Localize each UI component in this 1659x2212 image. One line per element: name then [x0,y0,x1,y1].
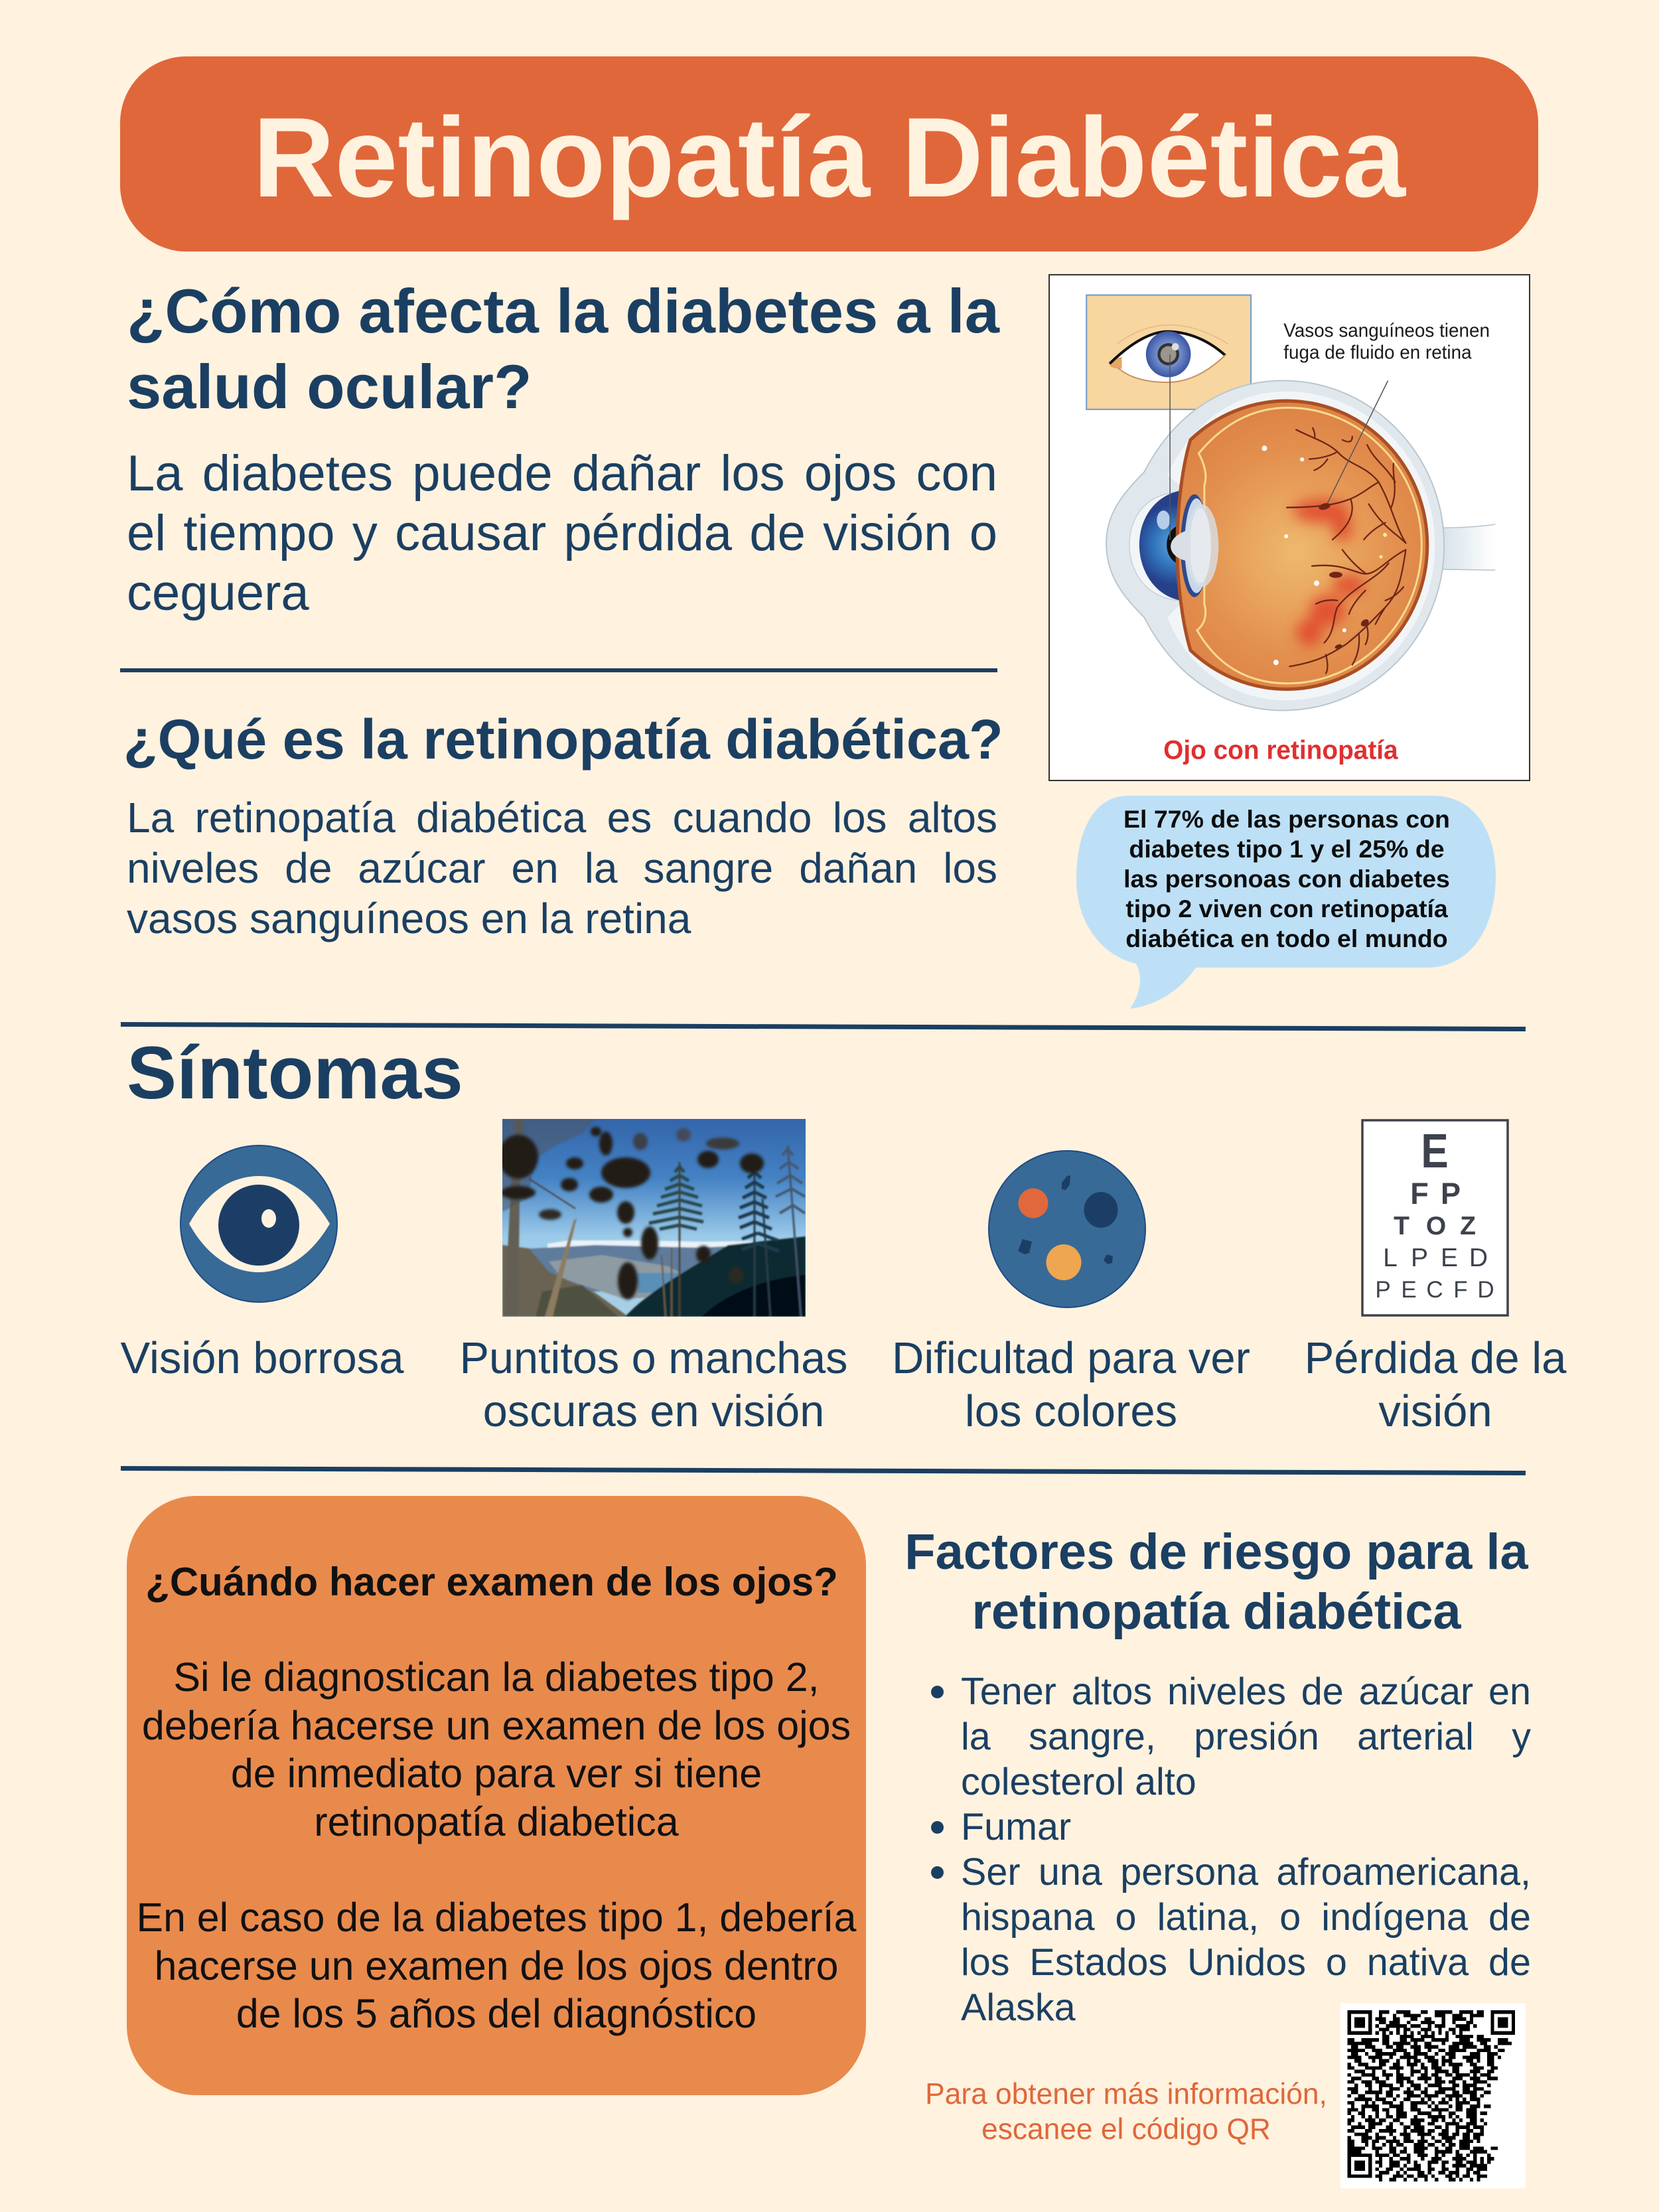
type 2 text: Si le diagnostican la diabetes tipo 2, [173,1655,820,1700]
heading: risk factors: retinopatía diabética [972,1584,1461,1640]
label: blurred vision: Visión borrosa [120,1333,404,1383]
callout label: Vasos sanguíneos tienen [1283,319,1490,340]
figure: eye with retinopathy [1048,274,1530,781]
icon: eye chart: P [1441,1177,1461,1211]
QR code [1340,2003,1526,2189]
icon: eye chart: Z [1460,1212,1476,1240]
heading: how diabetes affects eyes [127,276,1000,421]
icon: eye chart: D [1469,1244,1488,1272]
heading: risk factors [904,1524,1529,1640]
text block: diabetes damage: ceguera [127,565,309,621]
type 1 text [137,1895,856,2036]
type 1 text: de los 5 años del diagnóstico [236,1991,757,2036]
heading: how diabetes affects eyes: ¿Cómo afecta la diabetes a la [127,276,999,346]
optic nerve [1443,524,1495,570]
callout: speech bubble statistic: tipo 2 viven con retinopatía [1125,895,1448,922]
bullet list: risk factors: hispana o latina, o indígena de [961,1896,1531,1939]
heading: symptoms: Síntomas [127,1031,463,1114]
dead snag [545,1218,577,1317]
bullet list: risk factors: Fumar [961,1806,1071,1848]
text block: diabetes damage: el tiempo y causar pérdida de visión o [127,505,997,561]
text block: diabetes damage [127,445,997,621]
type 1 text: En el caso de la diabetes tipo 1, debería [137,1895,856,1940]
bullet list: risk factors: la sangre, presión arterial y [961,1716,1531,1758]
text block: retinopathy definition [127,794,997,942]
callout label: fuga de fluido en retina [1283,341,1472,362]
icon: eye chart: F [1410,1177,1429,1211]
callout: speech bubble statistic: diabética en todo el mundo [1125,924,1448,952]
label: spots: oscuras en visión [483,1387,824,1436]
panel heading: ¿Cuándo hacer examen de los ojos? [145,1560,838,1604]
text block: retinopathy definition: niveles de azúcar en la sangre dañan los [127,844,997,892]
retina [1177,401,1427,689]
bullet list: risk factors: Tener altos niveles de azúcar en [961,1670,1531,1713]
panel: when to have an eye exam [127,1496,866,2095]
label: colours: los colores [965,1386,1177,1436]
heading: how diabetes affects eyes: salud ocular? [127,352,532,421]
caption: Ojo con retinopatía [1163,735,1399,765]
icon: eye chart: E [1421,1125,1449,1178]
icon: eye chart: T [1394,1212,1409,1240]
heading: what is diabetic retinopathy: ¿Qué es la retinopatía diabética? [123,707,1003,771]
icon: eye chart: O [1426,1212,1446,1240]
bullet list: risk factors: colesterol alto [961,1761,1196,1803]
label: colours [892,1333,1250,1436]
type 2 text [142,1655,851,1844]
icon: eye chart: E [1401,1277,1417,1303]
label: vision loss [1305,1333,1566,1436]
QR caption [925,2078,1327,2146]
inset: external eye [1086,295,1251,409]
callout: speech bubble statistic: diabetes tipo 1 y el 25% de [1129,835,1445,863]
icon: eye chart: F [1453,1277,1468,1303]
icon: eye chart: E [1441,1244,1458,1272]
iris [1139,490,1181,601]
text block: retinopathy definition: vasos sanguíneos en la retina [127,895,691,942]
icon: blurred vision eye [180,1145,338,1303]
text block: diabetes damage: La diabetes puede dañar los ojos con [127,445,997,502]
title banner [120,56,1538,252]
label: vision loss: visión [1378,1386,1492,1436]
label: spots [460,1334,847,1436]
title banner: Retinopatía Diabética [253,94,1406,221]
label: vision loss: Pérdida de la [1305,1333,1566,1383]
image: landscape with dark floaters [502,1119,806,1317]
bullet list: risk factors: Ser una persona afroamericana, [961,1851,1531,1893]
type 1 text: hacerse un examen de los ojos dentro [155,1943,838,1988]
label: colours: Dificultad para ver [892,1333,1250,1383]
pines [678,1162,681,1317]
QR caption: escanee el código QR [981,2113,1271,2146]
bullet list: risk factors [931,1670,1531,2029]
eyeball sclera [1106,381,1444,711]
distant snow line [547,1240,752,1249]
icon: eye chart: C [1426,1277,1443,1303]
icon: colour difficulty circle [988,1150,1146,1308]
label: spots: Puntitos o manchas [460,1334,847,1383]
exudate dots [1262,445,1387,665]
callout: speech bubble statistic: las personoas con diabetes [1123,865,1450,893]
type 2 text: debería hacerse un examen de los ojos [142,1703,851,1748]
bullet list: risk factors: los Estados Unidos o nativa de [961,1941,1531,1984]
heading: risk factors: Factores de riesgo para la [904,1524,1528,1580]
callout: speech bubble statistic [1076,796,1496,1009]
icon: eye chart: P [1411,1244,1428,1272]
type 2 text: de inmediato para ver si tiene [231,1751,762,1796]
lens [1171,494,1218,597]
left tree trunk and canopy [504,1119,524,1317]
type 2 text: retinopatía diabetica [314,1799,679,1844]
retinal vessels [1287,428,1406,673]
icon: eye chart: L [1383,1244,1398,1272]
text block: retinopathy definition: La retinopatía diabética es cuando los altos [127,794,997,842]
callout lines [1170,354,1388,540]
icon: eye chart [1361,1119,1509,1317]
QR caption: Para obtener más información, [925,2078,1327,2110]
icon: eye chart: D [1477,1277,1494,1303]
icon: eye chart: P [1375,1277,1391,1303]
haemorrhage patches [1293,499,1366,646]
callout: speech bubble statistic: El 77% de las personas con [1123,805,1450,833]
bullet list: risk factors: Alaska [961,1986,1076,2029]
